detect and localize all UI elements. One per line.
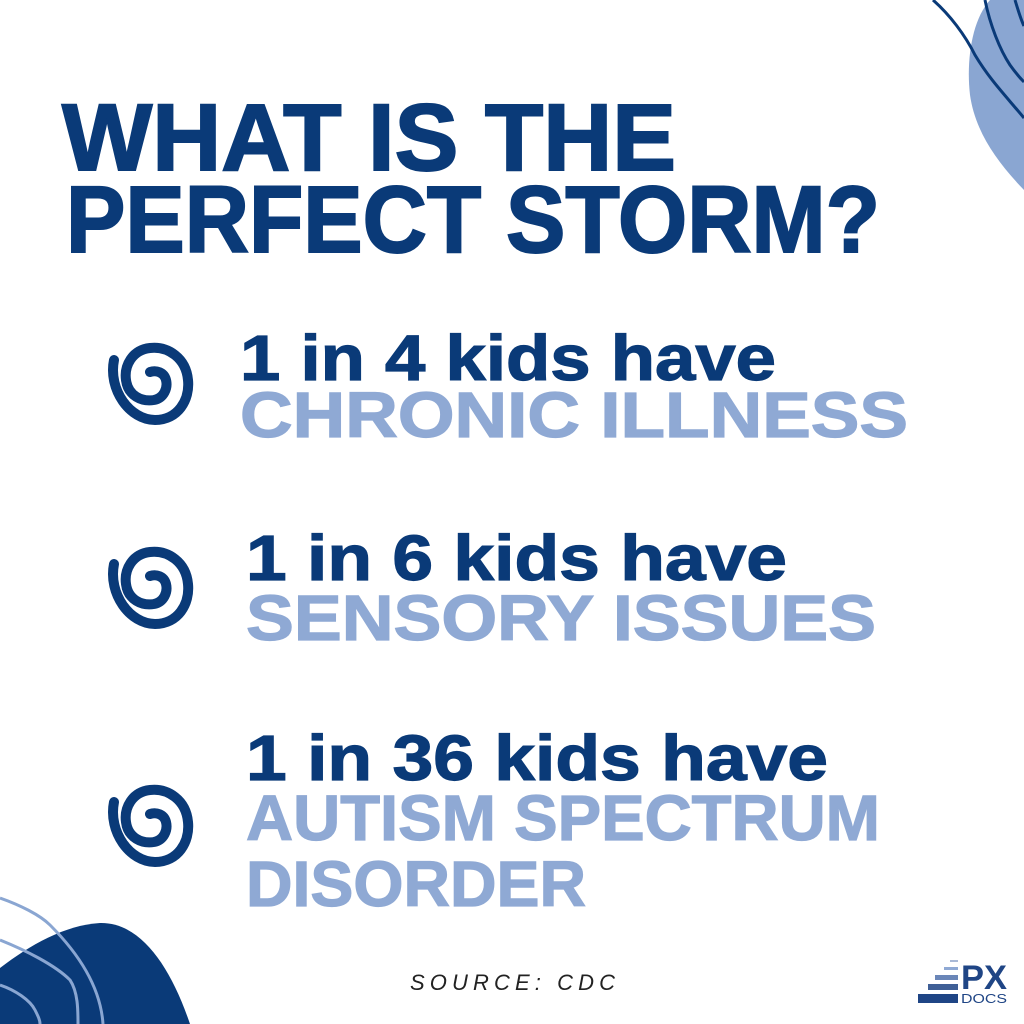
decoration: bottom-left blob <box>0 898 190 1024</box>
source: SOURCE: CDC <box>410 970 615 995</box>
item 3: autism: AUTISM SPECTRUM <box>246 782 880 854</box>
decoration: top-right blob <box>933 0 1024 190</box>
logo: PX docs: DOCS <box>961 991 1007 1006</box>
logo: PX docs <box>918 959 1007 1006</box>
item 1: chronic illness: CHRONIC ILLNESS <box>240 379 908 451</box>
icon: spiral <box>113 552 188 624</box>
item 3: autism: DISORDER <box>246 848 586 920</box>
item 2: sensory issues <box>113 522 876 654</box>
item 3: autism <box>113 722 880 920</box>
item 1: chronic illness <box>113 322 908 451</box>
logo: PX docs: PX <box>961 959 1007 997</box>
title: PERFECT STORM? <box>66 167 880 273</box>
item 2: sensory issues: SENSORY ISSUES <box>246 582 876 654</box>
icon: spiral <box>113 348 188 420</box>
title <box>62 85 880 273</box>
item 2: sensory issues: 1 in 6 kids have <box>246 522 787 594</box>
title: WHAT IS THE <box>62 85 676 191</box>
icon: spiral <box>113 790 188 862</box>
item 3: autism: 1 in 36 kids have <box>246 722 828 794</box>
item 1: chronic illness: 1 in 4 kids have <box>240 322 776 394</box>
